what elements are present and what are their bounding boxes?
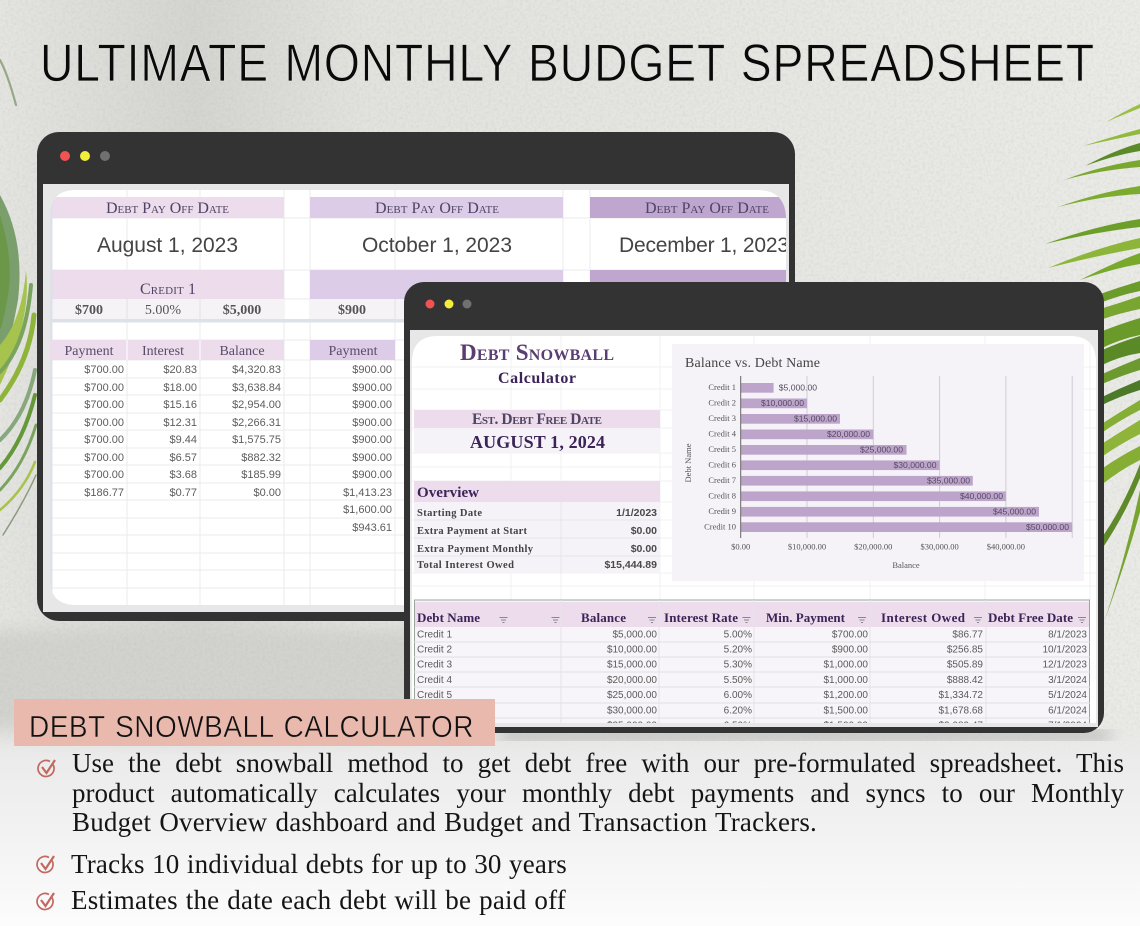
- spreadsheet: debt payoff columns: December 1, 2023: [619, 234, 789, 257]
- debt table: 6.50%: [724, 720, 752, 732]
- estimated debt free date: [414, 410, 660, 453]
- spreadsheet: calculator: [412, 336, 1096, 732]
- bar chart: balance vs debt name: $50,000.00: [1026, 522, 1069, 532]
- debt table: 6.00%: [724, 690, 752, 701]
- bar chart: balance vs debt name: $40,000.00: [960, 491, 1003, 501]
- estimated debt free date: Est. Debt Free Date: [472, 411, 602, 428]
- debt table: $256.85: [947, 644, 983, 656]
- bar chart: balance vs debt name: $5,000.00: [779, 382, 817, 392]
- debt table: $25,000.00: [607, 690, 657, 701]
- overview table: 1/1/2023: [616, 507, 657, 519]
- spreadsheet: debt payoff columns: $6.57: [169, 452, 197, 464]
- spreadsheet: debt payoff columns: Balance: [219, 344, 265, 359]
- spreadsheet: debt payoff columns: $1,413.23: [343, 487, 392, 499]
- debt table: 6.20%: [724, 706, 752, 716]
- debt table: 5.50%: [724, 675, 752, 686]
- debt table: $1,678.68: [938, 706, 983, 716]
- overview table: $0.00: [631, 525, 657, 537]
- debt table: $35,000.00: [607, 720, 657, 732]
- bullet text: product automatically calculates your monthly debt payments and syncs to our Monthly: [72, 778, 1124, 808]
- debt table: Min. Payment: [766, 610, 846, 625]
- debt table: $1,334.72: [938, 690, 983, 701]
- debt table: Debt Name: [417, 610, 480, 625]
- spreadsheet: debt payoff columns: Credit 1: [140, 281, 196, 298]
- spreadsheet: debt payoff columns: $0.77: [169, 487, 197, 499]
- spreadsheet: debt payoff columns: Debt Pay Off Date: [106, 200, 229, 217]
- debt table: 10/1/2023: [1042, 644, 1087, 656]
- debt table: Credit 1: [417, 630, 452, 640]
- spreadsheet: debt payoff columns: $15.16: [163, 399, 197, 411]
- debt table: Credit 3: [417, 660, 452, 670]
- spreadsheet: debt payoff columns: $900.00: [352, 452, 392, 464]
- spreadsheet: debt payoff columns: $186.77: [84, 487, 124, 499]
- debt table: [414, 600, 1090, 732]
- bar chart: balance vs debt name: $15,000.00: [794, 414, 837, 424]
- spreadsheet: debt payoff columns: $900.00: [352, 434, 392, 446]
- debt table: $30,000.00: [607, 706, 657, 716]
- overview table: $15,444.89: [604, 559, 657, 571]
- overview table: $0.00: [631, 543, 657, 555]
- filter icons: [500, 618, 1086, 622]
- debt table: $700.00: [832, 630, 868, 640]
- spreadsheet: debt payoff columns: $700.00: [84, 434, 124, 446]
- debt table: $1,000.00: [824, 675, 868, 686]
- debt table: $5,000.00: [612, 630, 657, 640]
- bar chart: balance vs debt name: $35,000.00: [927, 476, 970, 486]
- icon: check 1: [38, 760, 55, 776]
- spreadsheet: debt payoff columns: $900.00: [352, 364, 392, 376]
- debt table: $1,000.00: [824, 660, 868, 670]
- back browser window: [37, 132, 795, 621]
- debt table: 7/1/2024: [1048, 720, 1087, 732]
- spreadsheet: debt payoff columns: $900.00: [352, 382, 392, 394]
- spreadsheet: debt payoff columns: $0.00: [253, 487, 281, 499]
- bar chart: balance vs debt name: $40,000.00: [987, 542, 1025, 552]
- spreadsheet: debt payoff columns: $2,954.00: [232, 399, 281, 411]
- palm leaves: right: [1045, 104, 1140, 622]
- spreadsheet: debt payoff columns: October 1, 2023: [362, 234, 512, 257]
- spreadsheet: debt payoff columns: $900.00: [352, 417, 392, 429]
- bar chart: balance vs debt name: $30,000.00: [920, 542, 959, 552]
- bullet text: Budget Overview dashboard and Budget and Transaction Trackers.: [72, 807, 817, 837]
- debt table: Credit 2: [417, 644, 452, 656]
- debt table: $900.00: [832, 644, 868, 656]
- spreadsheet: debt payoff columns: $12.31: [163, 417, 197, 429]
- debt table: Credit 5: [417, 690, 452, 701]
- bullet text: Estimates the date each debt will be paid off: [71, 885, 566, 915]
- debt table: $888.42: [947, 675, 983, 686]
- bar chart: balance vs debt name: Debt Name: [683, 443, 693, 482]
- overview table: Starting Date: [417, 508, 482, 519]
- overview table: Extra Payment at Start: [417, 526, 528, 537]
- spreadsheet: debt payoff columns: Debt Pay Off Date: [375, 200, 499, 217]
- bullet text: [71, 748, 1124, 915]
- debt table: Debt Free Date: [988, 610, 1073, 625]
- bar chart: balance vs debt name: $25,000.00: [860, 444, 903, 454]
- bar chart: balance vs debt name: Credit 5: [708, 444, 736, 454]
- bar chart: balance vs debt name: Credit 7: [708, 475, 736, 485]
- bar chart: balance vs debt name: Credit 1: [708, 382, 736, 392]
- debt table: Credit 4: [417, 675, 452, 686]
- debt table: $1,500.00: [824, 720, 868, 732]
- bar chart: balance vs debt name: $10,000.00: [788, 542, 826, 552]
- debt table: Interest Rate: [664, 610, 738, 625]
- debt table: $1,200.00: [824, 690, 868, 701]
- bullet text: Use the debt snowball method to get debt free with our pre-formulated spreadsheet. This: [72, 748, 1124, 778]
- estimated debt free date: AUGUST 1, 2024: [470, 432, 605, 452]
- spreadsheet: debt payoff columns: $943.61: [352, 522, 392, 534]
- spreadsheet: debt payoff columns: $18.00: [163, 382, 197, 394]
- bar chart: balance vs debt name: [672, 344, 1084, 581]
- spreadsheet: debt payoff columns: Debt Pay Off Date: [645, 200, 769, 217]
- spreadsheet: debt payoff columns: $185.99: [241, 469, 281, 481]
- overview table: Overview: [417, 485, 479, 501]
- bar chart: balance vs debt name: $10,000.00: [761, 398, 804, 408]
- spreadsheet: debt payoff columns: $700: [75, 303, 103, 318]
- spreadsheet: debt payoff columns: Payment: [64, 344, 114, 359]
- calculator heading: Calculator: [498, 370, 576, 387]
- bar chart: balance vs debt name: $0.00: [731, 542, 750, 552]
- debt table: 12/1/2023: [1042, 660, 1087, 670]
- debt table: 3/1/2024: [1048, 675, 1087, 686]
- spreadsheet: debt payoff columns: $1,575.75: [232, 434, 281, 446]
- spreadsheet: debt payoff columns: $3.68: [169, 469, 197, 481]
- debt table: 5/1/2024: [1048, 690, 1087, 701]
- bar chart: balance vs debt name: Credit 8: [708, 490, 736, 500]
- spreadsheet: debt payoff columns: $20.83: [163, 364, 197, 376]
- spreadsheet: debt payoff columns: $900.00: [352, 399, 392, 411]
- debt table: $10,000.00: [607, 644, 657, 656]
- debt table: $505.89: [947, 660, 983, 670]
- bar chart: balance vs debt name: $20,000.00: [827, 429, 870, 439]
- debt table: 5.30%: [724, 660, 752, 670]
- bar chart: balance vs debt name: Credit 2: [708, 398, 736, 408]
- spreadsheet: debt payoff columns: $700.00: [84, 417, 124, 429]
- bar chart: balance vs debt name: Balance: [892, 560, 920, 570]
- overview table: Extra Payment Monthly: [417, 544, 534, 555]
- debt table: $2,089.47: [938, 720, 983, 732]
- spreadsheet: debt payoff columns: August 1, 2023: [97, 234, 238, 257]
- debt table: 5.20%: [724, 644, 752, 656]
- overview table: [414, 481, 660, 573]
- bar chart: balance vs debt name: Credit 6: [708, 460, 736, 470]
- bar chart: balance vs debt name: $30,000.00: [893, 460, 937, 470]
- bar chart: balance vs debt name: Credit 3: [708, 413, 736, 423]
- spreadsheet: debt payoff columns: 5.00%: [145, 303, 181, 318]
- bar chart: balance vs debt name: Credit 10: [704, 522, 736, 532]
- caption banner: DEBT SNOWBALL CALCULATOR: [29, 710, 474, 744]
- spreadsheet: debt payoff columns: $900: [338, 303, 366, 318]
- caption banner: [14, 699, 495, 746]
- spreadsheet: debt payoff columns: $700.00: [84, 364, 124, 376]
- overview table: Total Interest Owed: [417, 560, 514, 571]
- icon: check 2: [37, 856, 54, 872]
- debt table: 6/1/2024: [1048, 706, 1087, 716]
- calculator heading: Debt Snowball: [460, 340, 614, 365]
- spreadsheet: debt payoff columns: $2,266.31: [232, 417, 281, 429]
- spreadsheet: debt payoff columns: $3,638.84: [232, 382, 281, 394]
- palm leaves: left: [0, 60, 36, 535]
- spreadsheet: debt payoff columns: $700.00: [84, 382, 124, 394]
- debt table: $15,000.00: [607, 660, 657, 670]
- spreadsheet: debt payoff columns: Payment: [328, 344, 378, 359]
- spreadsheet: debt payoff columns: $5,000: [223, 303, 261, 318]
- spreadsheet: debt payoff columns: [50, 190, 789, 605]
- debt table: $1,500.00: [824, 706, 868, 716]
- debt table: 8/1/2023: [1048, 630, 1087, 640]
- bar chart: balance vs debt name: Credit 4: [708, 428, 737, 438]
- front browser window: [404, 282, 1104, 733]
- bullet text: Tracks 10 individual debts for up to 30 years: [71, 849, 567, 879]
- bar chart: balance vs debt name: Balance vs. Debt Name: [685, 356, 820, 371]
- spreadsheet: debt payoff columns: $700.00: [84, 399, 124, 411]
- spreadsheet: debt payoff columns: $882.32: [241, 452, 281, 464]
- calculator heading: [460, 344, 614, 383]
- debt table: $20,000.00: [607, 675, 657, 686]
- spreadsheet: debt payoff columns: $700.00: [84, 452, 124, 464]
- spreadsheet: debt payoff columns: Interest: [142, 344, 184, 359]
- debt table: Interest Owed: [881, 610, 966, 625]
- spreadsheet: debt payoff columns: $700.00: [84, 469, 124, 481]
- spreadsheet: debt payoff columns: $4,320.83: [232, 364, 281, 376]
- debt table: 5.00%: [724, 630, 752, 640]
- spreadsheet: debt payoff columns: $9.44: [169, 434, 197, 446]
- icon: check 3: [37, 893, 54, 909]
- debt table: $86.77: [952, 630, 983, 640]
- spreadsheet: debt payoff columns: $900.00: [352, 469, 392, 481]
- spreadsheet: debt payoff columns: $1,600.00: [343, 504, 392, 516]
- debt table: Balance: [581, 610, 626, 625]
- bar chart: balance vs debt name: $45,000.00: [993, 506, 1036, 516]
- bar chart: balance vs debt name: $20,000.00: [854, 542, 892, 552]
- bar chart: balance vs debt name: Credit 9: [708, 506, 736, 516]
